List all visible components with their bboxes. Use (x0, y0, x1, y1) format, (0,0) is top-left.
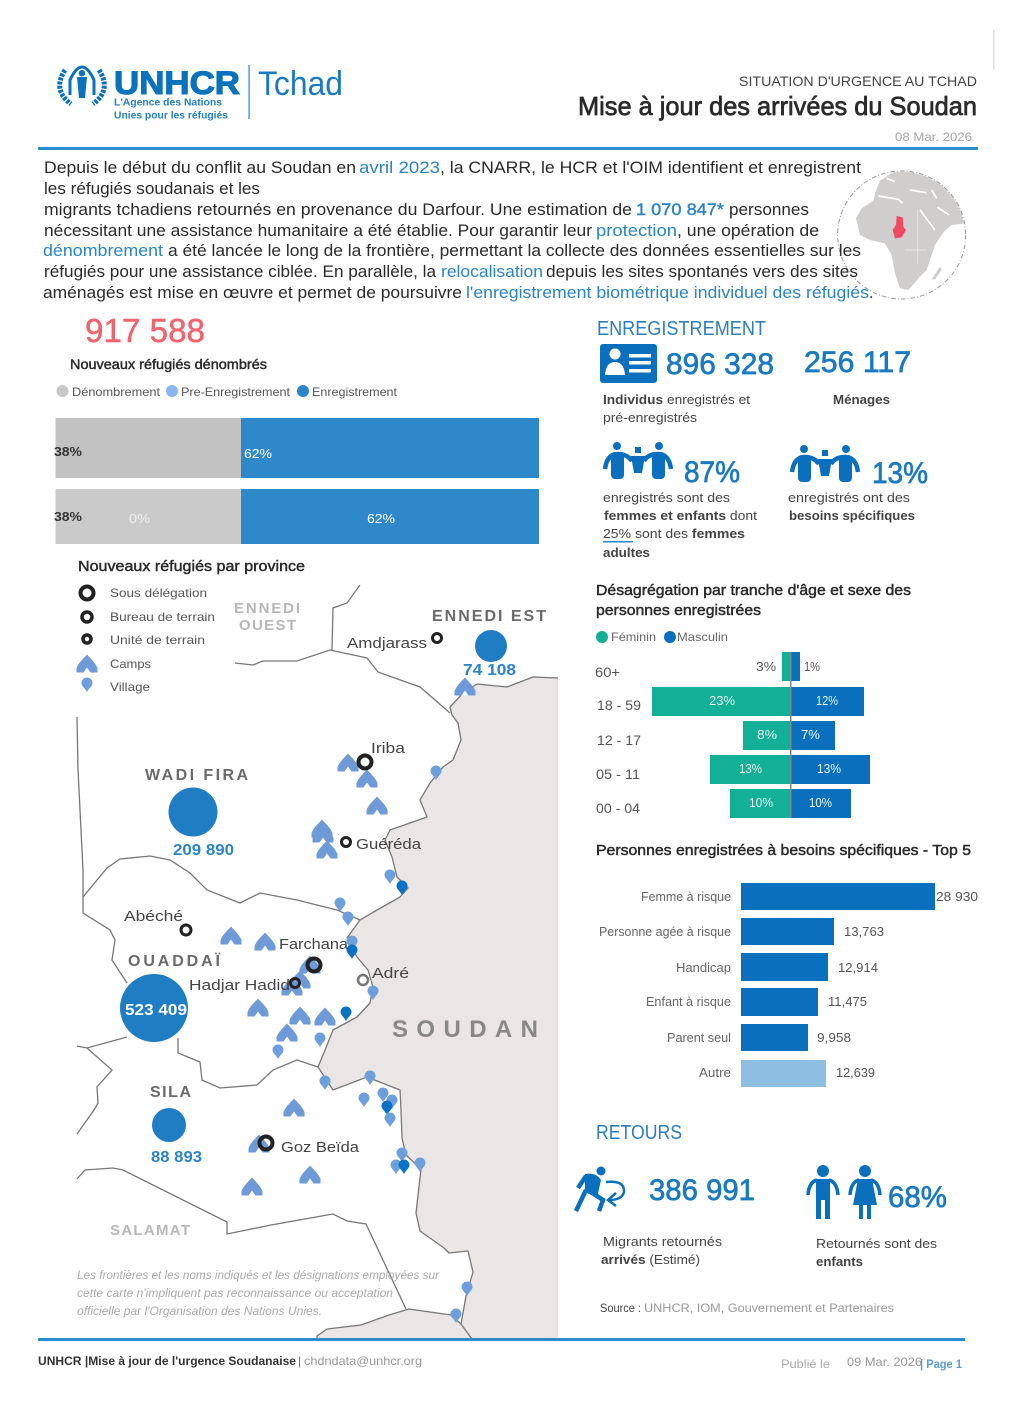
legend: Dénombrement (72, 385, 161, 399)
specific needs caption: besoins spécifiques (789, 508, 915, 523)
women and children caption: 25% sont des femmes (603, 526, 745, 541)
town labels (124, 635, 427, 1156)
bar percentages: 7% (801, 728, 820, 742)
returnees caption: Migrants retournés (603, 1234, 723, 1249)
bar values: 13,763 (844, 925, 884, 939)
intro text: Depuis le début du conflit au Soudan en (44, 159, 356, 177)
source: Source : (600, 1301, 641, 1315)
province labels: SOUDAN (392, 1016, 538, 1043)
women and children caption (603, 490, 757, 560)
bar values: 11,475 (828, 995, 867, 1009)
intro text: . (869, 284, 874, 302)
footer: UNHCR |Mise à jour de l'urgence Soudanaise (38, 1354, 296, 1368)
individuals caption: pré-enregistrés (603, 410, 698, 425)
chart heading: personnes enregistrées (596, 602, 761, 619)
returnees caption (601, 1234, 723, 1267)
stat: individuals: 896 328 (666, 348, 774, 381)
bar percentages: 10% (809, 796, 832, 810)
town labels: Goz Beïda (281, 1139, 360, 1156)
age labels: 05 - 11 (596, 766, 640, 782)
map heading: Nouveaux réfugiés par province (78, 558, 305, 575)
stat: households: 256 117 (804, 346, 911, 379)
map legend: Unité de terrain (110, 633, 205, 647)
province labels: OUEST (239, 617, 296, 634)
intro text: aménagés est mise en œuvre et permet de poursuivre (43, 284, 462, 302)
province labels: WADI FIRA (145, 767, 248, 784)
section heading: RETOURS (596, 1122, 682, 1144)
stacked bar chart: 38% (54, 509, 82, 524)
footer: chdndata@unhcr.org (304, 1354, 422, 1368)
bar percentages: 10% (749, 796, 773, 810)
stat: specific needs: 13% (872, 457, 928, 490)
bar labels: Autre (699, 1066, 731, 1080)
chart heading: Personnes enregistrées à besoins spécifiques - Top 5 (596, 842, 971, 859)
panel: specific needs top 5 (596, 842, 978, 1087)
intro text: a été lancée le long de la frontière, permettant la collecte des données essentielles sur les (168, 242, 861, 260)
women and children caption: enregistrés sont des (603, 490, 731, 505)
bar labels: Handicap (676, 961, 731, 975)
date: 08 Mar. 2026 (895, 130, 972, 144)
returnees caption: arrivés (Estimé) (601, 1252, 700, 1267)
refugee bubbles (120, 630, 507, 1142)
big number: 917 588 (85, 312, 205, 349)
subheading: Nouveaux réfugiés dénombrés (70, 356, 267, 372)
intro text: réfugiés pour une assistance ciblée. En parallèle, la (44, 263, 437, 281)
panel: age and sex pyramid (595, 582, 911, 818)
bubble values: 88 893 (151, 1149, 202, 1166)
icon: family right (792, 445, 858, 482)
intro text: dénombrement (43, 242, 163, 260)
bar percentages: 13% (817, 762, 841, 776)
intro text: nécessitant une assistance humanitaire a été établie. Pour garantir leur (44, 222, 593, 240)
map legend: Sous délégation (110, 586, 207, 600)
province labels: OUADDAÏ (128, 952, 221, 970)
women and children caption: adultes (603, 545, 650, 560)
bar percentages: 13% (739, 762, 762, 776)
town labels: Adré (372, 965, 409, 982)
bar values: 28 930 (936, 890, 978, 904)
bar percentages: 3% (756, 660, 776, 674)
icon: UNHCR emblem (60, 67, 104, 104)
town labels: Farchana (279, 936, 349, 953)
logo tagline: L'Agence des Nations (114, 96, 222, 108)
intro text: , la CNARR, le HCR et l'OIM identifient et enregistrent (440, 159, 861, 177)
stacked bar chart: 62% (244, 446, 272, 461)
intro text: depuis les sites spontanés vers des sites (546, 263, 858, 281)
age labels: 00 - 04 (596, 800, 640, 816)
province boundaries (77, 585, 450, 1309)
header: UNHCR logo (60, 65, 343, 122)
age labels: 18 - 59 (597, 697, 641, 713)
bar percentages: 23% (709, 694, 735, 708)
intro text: les réfugiés soudanais et les (44, 180, 260, 198)
panel: returns (576, 1122, 947, 1315)
supertitle: SITUATION D'URGENCE AU TCHAD (739, 73, 977, 89)
stat: returnees: 386 991 (649, 1174, 755, 1207)
age labels: 60+ (595, 664, 620, 680)
chart legend: Féminin (611, 630, 656, 644)
footer: Publié le (781, 1357, 830, 1371)
bar labels: Femme à risque (641, 890, 731, 904)
bar percentages: 12% (816, 694, 838, 708)
chart legend: Masculin (677, 630, 728, 644)
horizontal bars (741, 883, 935, 1087)
age labels (595, 664, 641, 816)
map legend: Village (110, 680, 150, 694)
town labels: Iriba (371, 740, 406, 757)
village markers (272, 766, 472, 1323)
camp markers (220, 678, 476, 1196)
stacked bar chart: 38% (54, 444, 82, 459)
chart heading (596, 582, 911, 619)
intro text: l'enregistrement biométrique individuel des réfugiés (466, 284, 869, 302)
bar labels: Enfant à risque (646, 995, 731, 1009)
bar percentages: 1% (804, 660, 820, 674)
children caption: enfants (816, 1254, 863, 1269)
Sudan land area (317, 677, 558, 1339)
specific needs caption: enregistrés ont des (788, 490, 911, 505)
footer: | Page 1 (920, 1357, 962, 1371)
map disclaimer: Les frontières et les noms indiqués et les désignations employées sur (77, 1268, 440, 1282)
bar values: 9,958 (817, 1031, 851, 1045)
town labels: Abéché (124, 908, 183, 925)
bubble values: 523 409 (125, 1002, 187, 1019)
panel: registration (597, 318, 928, 560)
bubble values: 74 108 (463, 662, 516, 679)
source: UNHCR, IOM, Gouvernement et Partenaires (644, 1301, 894, 1315)
footer (38, 1354, 962, 1371)
panel: new refugees counted (54, 312, 539, 544)
map legend (76, 586, 215, 694)
bar percentages (709, 660, 841, 810)
age labels: 12 - 17 (597, 732, 641, 748)
bubble values: 209 890 (173, 842, 234, 859)
stat: women and children: 87% (684, 456, 740, 489)
intro text: protection (596, 222, 677, 240)
icon: locator globe (838, 170, 968, 299)
header: title block (578, 73, 977, 144)
map legend: Camps (110, 657, 151, 671)
map disclaimer: officielle par l'Organisation des Nations Unies. (77, 1304, 322, 1318)
country name: Tchad (258, 65, 343, 103)
chart legend (596, 630, 728, 644)
logo tagline (114, 96, 228, 122)
bar percentages: 8% (757, 728, 777, 742)
map disclaimer (77, 1268, 440, 1318)
decorative edge mark (993, 30, 994, 70)
icon: returning runner (576, 1166, 624, 1211)
bar labels: Parent seul (667, 1031, 731, 1045)
intro text: 1 070 847* (636, 201, 725, 219)
province labels: SILA (150, 1084, 191, 1101)
legend (56, 385, 398, 399)
province labels: ENNEDI EST (432, 608, 546, 625)
icon: ID card (600, 344, 657, 383)
town labels: Hadjar Hadid (189, 977, 290, 994)
icon: family left (605, 442, 671, 479)
stacked bar chart: 0% (129, 511, 150, 526)
bar values: 12,639 (836, 1066, 875, 1080)
stat: children share: 68% (888, 1181, 947, 1214)
intro text: migrants tchadiens retournés en provenance du Darfour. Une estimation de (44, 201, 632, 219)
pyramid bars (652, 652, 870, 818)
stacked bar chart (54, 418, 539, 544)
town labels: Amdjarass (347, 635, 427, 652)
section heading: ENREGISTREMENT (597, 318, 766, 340)
map panel (76, 585, 558, 1339)
town labels: Guéréda (356, 836, 422, 853)
intro text (43, 159, 874, 302)
stacked bar chart: 62% (367, 511, 395, 526)
footer: 09 Mar. 2026 (847, 1355, 922, 1369)
intro text: relocalisation (441, 263, 543, 281)
province labels: ENNEDI (234, 600, 300, 617)
households caption: Ménages (833, 392, 890, 407)
title: Mise à jour des arrivées du Soudan (578, 91, 977, 121)
children caption: Retournés sont des (816, 1236, 938, 1251)
specific needs caption (788, 490, 915, 523)
individuals caption: Individus enregistrés et (603, 392, 750, 407)
bar values: 12,914 (838, 961, 878, 975)
bar labels: Personne agée à risque (599, 925, 731, 939)
children caption (816, 1236, 938, 1269)
footer: | (298, 1354, 301, 1368)
chart heading: Désagrégation par tranche d'âge et sexe des (596, 582, 911, 599)
province labels (110, 600, 546, 1239)
icon: boy and girl (808, 1165, 880, 1219)
office markers (181, 634, 442, 1150)
map legend: Bureau de terrain (110, 610, 215, 624)
intro text: personnes (729, 201, 809, 219)
logo wordmark: UNHCR (114, 65, 240, 101)
logo tagline: Unies pour les réfugiés (114, 110, 228, 122)
bar labels (599, 890, 731, 1080)
map disclaimer: cette carte n'impliquent pas reconnaissance ou acceptation (77, 1286, 393, 1300)
individuals caption (603, 392, 750, 425)
bubble values (125, 662, 516, 1166)
bar values (817, 890, 978, 1080)
legend: Pre-Enregistrement (181, 385, 291, 399)
women and children caption: femmes et enfants dont (604, 508, 757, 523)
intro text: avril 2023 (359, 159, 440, 177)
intro text: , une opération de (677, 222, 819, 240)
province labels: SALAMAT (110, 1222, 190, 1239)
legend: Enregistrement (312, 385, 398, 399)
